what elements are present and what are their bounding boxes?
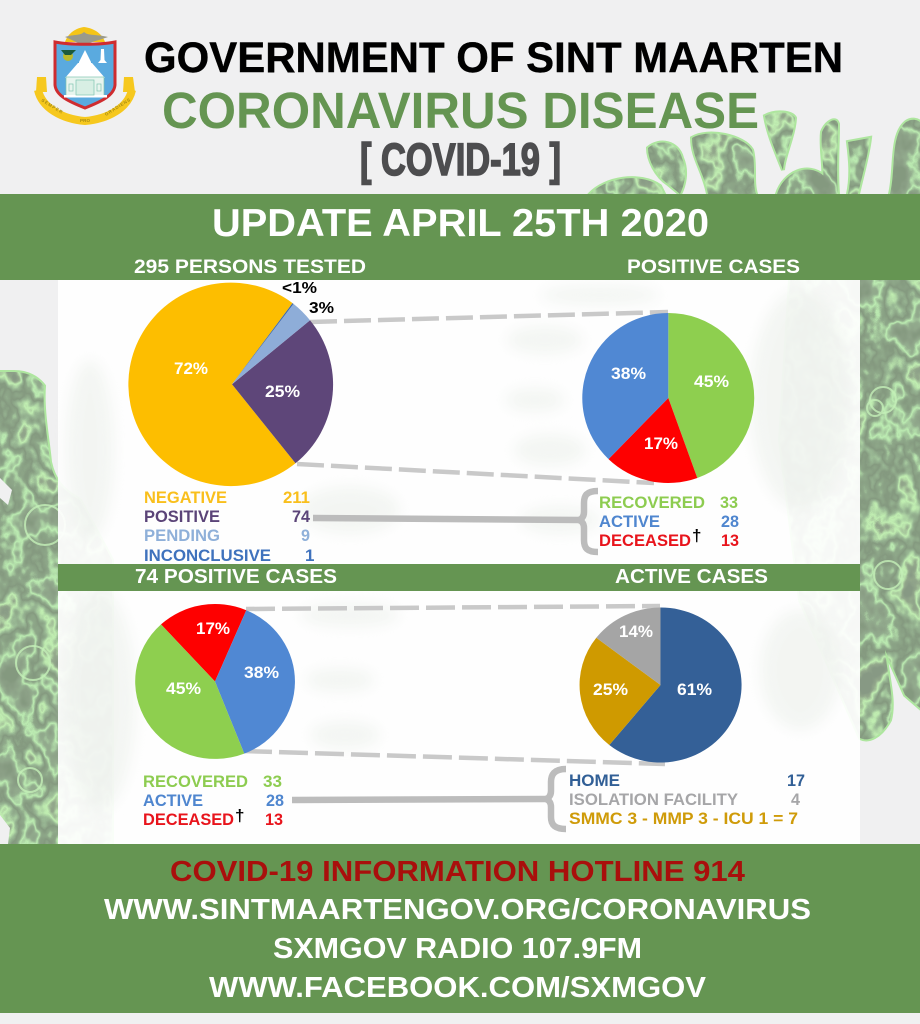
legend: persons tested: 9 [301,526,310,545]
legend: active cases [569,771,805,828]
crest courthouse [64,50,107,98]
legend: active cases: ISOLATION FACILITY [569,790,739,809]
legend: persons tested [144,488,314,565]
legend: persons tested: 1 [305,546,314,565]
heading: positive cases: POSITIVE CASES [627,256,800,278]
legend: 74 positive cases: DECEASED [143,810,234,829]
legend: 74 positive cases: ACTIVE [143,791,203,810]
footer: radio: SXMGOV RADIO 107.9FM [273,933,642,965]
legend: active cases: 4 [791,790,801,809]
crest monument [98,49,107,63]
header title: coronavirus disease: CORONAVIRUS DISEASE [162,82,759,139]
legend: persons tested: PENDING [144,526,220,545]
connector and brace: positive breakdown [313,491,598,552]
legend: positive cases: 28 [721,512,739,531]
faint virus watermark in panel [64,285,850,810]
crest flower [61,50,76,61]
update date heading: UPDATE APRIL 25TH 2020 [212,202,709,245]
pie chart: positive cases [582,313,754,483]
panel: white content area [58,280,860,844]
crest: Sint Maarten coat of arms [36,27,135,123]
crest shield [55,42,115,108]
legend: positive cases: RECOVERED [599,493,705,512]
legend: persons tested: NEGATIVE [144,488,227,507]
pie chart: 74 positive cases [135,604,295,759]
heading: active cases: ACTIVE CASES [615,566,768,588]
legend: persons tested: INCONCLUSIVE [144,546,271,565]
legend: positive cases: ACTIVE [599,512,660,531]
legend: 74 positive cases [143,772,284,829]
footer: facebook: WWW.FACEBOOK.COM/SXMGOV [209,972,707,1004]
legend: positive cases: 13 [721,531,739,550]
pie chart: positive cases: 45% [694,372,729,391]
footer banner [0,844,920,1013]
legend: 74 positive cases: RECOVERED [143,772,248,791]
dashed zoom lines: positive to active [243,606,665,764]
header title: government: GOVERNMENT OF SINT MAARTEN [144,34,843,82]
pie chart: persons tested: <1% [282,280,317,297]
legend: positive cases: DECEASED [599,531,691,550]
pie chart: persons tested: 25% [265,382,300,401]
pie chart: persons tested: 3% [309,300,334,317]
legend: positive cases: † [692,526,701,545]
legend: active cases: 17 [787,771,805,790]
pie chart: active cases: 61% [677,680,712,699]
pie chart: 74 positive cases: 17% [196,619,230,638]
crest ribbon: GRADIENS [104,97,131,117]
pie chart: active cases: 25% [593,680,628,699]
legend: 74 positive cases: † [235,806,244,825]
pie chart: active cases [580,608,742,762]
legend: active cases: HOME [569,771,620,790]
pie chart: persons tested: 72% [174,359,208,378]
connector and brace: active breakdown [292,769,566,829]
legend: active cases: SMMC 3 - MMP 3 - ICU 1 = 7 [569,809,798,828]
heading: persons tested: 295 PERSONS TESTED [134,256,366,278]
header title: covid-19: [ COVID-19 ] [360,134,561,185]
crest ribbon [36,77,135,123]
pie chart: persons tested [128,280,334,486]
pie chart: 74 positive cases: 45% [166,679,201,698]
footer: website: WWW.SINTMAARTENGOV.ORG/CORONAVIRUS [104,894,811,926]
legend: persons tested: 211 [283,488,310,507]
legend: persons tested: 74 [292,507,311,526]
legend: positive cases: 33 [720,493,738,512]
crest ribbon: PRO [80,118,90,123]
dashed zoom lines: tested to positive [297,312,668,483]
virus illustration background [0,100,920,850]
pie chart: positive cases: 38% [611,364,646,383]
crest pelican [65,32,108,43]
heading: 74 positive cases: 74 POSITIVE CASES [135,566,337,588]
legend: 74 positive cases: 33 [263,772,282,791]
legend: positive cases [599,493,739,550]
pie chart: 74 positive cases: 38% [244,663,279,682]
legend: 74 positive cases: 28 [266,791,284,810]
crest ribbon: SEMPER [40,98,64,115]
legend: 74 positive cases: 13 [265,810,283,829]
pie chart: positive cases: 17% [644,434,678,453]
crest gold sun [65,27,105,42]
pie chart: active cases: 14% [619,622,653,641]
footer: hotline: COVID-19 INFORMATION HOTLINE 914 [170,856,745,888]
middle section banner [58,564,860,591]
update banner [0,194,920,280]
legend: persons tested: POSITIVE [144,507,220,526]
